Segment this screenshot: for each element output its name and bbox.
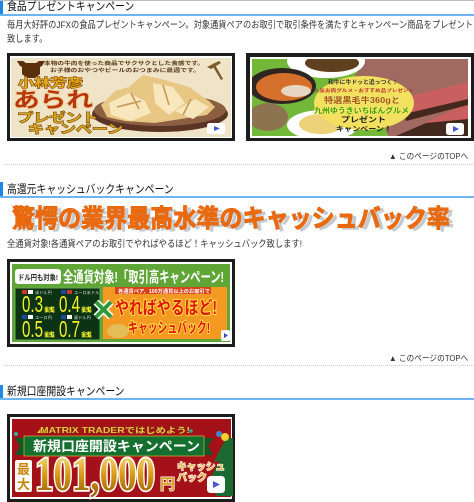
banner: new account opening campaign [7, 414, 235, 502]
heading: new account campaign [0, 384, 474, 400]
banner: all currency trading volume campaign: 0.7 [59, 316, 80, 342]
heading: new account campaign: 新規口座開設キャンペーン [7, 386, 125, 398]
banner: all currency trading volume campaign: 銭 [81, 306, 92, 314]
banner: beef and gourmet present campaign: 人気お肉グルメ・おすすめ品プレゼント [314, 87, 414, 94]
banner: beef and gourmet present campaign: キャンペーン！ [336, 125, 392, 133]
banner: arare present campaign: キャンペーン [28, 122, 123, 136]
banner: beef and gourmet present campaign: 特選黒毛牛360gと [324, 95, 400, 105]
link: page top: ▲ このページのTOPへ [389, 353, 468, 363]
banner: beef and gourmet present campaign [246, 53, 474, 141]
banner: arare present campaign: 小林芳彦 [18, 75, 83, 90]
banner: arare present campaign: プレゼント [17, 110, 98, 125]
banner: new account opening campaign: 新規口座開設キャンペーン [33, 439, 200, 454]
banner: arare present campaign: あられ [13, 89, 93, 112]
text block: food campaign intro: 毎月大好評のJFXの食品プレゼントキャンペーン。対象通貨ペアのお取引で取引条件を満たすとキャンペーン商品をプレゼント [7, 20, 473, 31]
banner: new account opening campaign: 大 [17, 477, 30, 492]
banner: all currency trading volume campaign: 豪ドル円 [74, 314, 91, 321]
banner: all currency trading volume campaign: ドル円も対象! [18, 272, 58, 282]
banner: arare present campaign: お子様のおやつやビールのおつまみに最適です。 [50, 66, 200, 74]
banner: new account opening campaign: 101,000 [35, 448, 155, 501]
banner: all currency trading volume campaign: 0.4 [59, 291, 80, 317]
banner: all currency trading volume campaign: ユーロ米ドル [74, 289, 99, 296]
text block: food campaign intro: 致します。 [7, 34, 47, 45]
banner: all currency trading volume campaign: 銭 [44, 331, 55, 339]
heading: high cashback campaign: 高還元キャッシュバックキャンペーン [7, 184, 174, 196]
heading: food present campaign: 食品プレゼントキャンペーン [7, 1, 134, 13]
banner: new account opening campaign: バック [177, 472, 207, 484]
banner: beef and gourmet present campaign: プレゼント [341, 115, 386, 124]
banner: all currency trading volume campaign: 0.3 [22, 291, 43, 317]
banner: all currency trading volume campaign: 銭 [44, 306, 55, 314]
link: page top: ▲ このページのTOPへ [389, 151, 468, 161]
banner: new account opening campaign: キャッシュ [177, 462, 225, 473]
headline: highest cashback rate in the industry: 驚愕の業界最高水準のキャッシュバック率 [12, 205, 450, 233]
banner: all currency trading volume campaign [7, 259, 235, 347]
banner: arare present campaign [7, 53, 235, 141]
text block: food campaign intro [7, 20, 473, 45]
banner: all currency trading volume campaign: 各通貨ペア、100万通貨以上のお取引で [118, 288, 210, 295]
banner: beef and gourmet present campaign: 九州ゆうきいちばんグルメ [314, 105, 409, 115]
text block: cashback intro: 全通貨対象!各通貨ペアのお取引でやればやるほど！キャッシュバック致します! [7, 239, 302, 250]
banner: new account opening campaign: MATRIX TRADERではじめよう! [40, 426, 190, 435]
banner: all currency trading volume campaign: ユーロ円 [35, 315, 52, 321]
heading: high cashback campaign [0, 182, 474, 198]
banner: all currency trading volume campaign: 銭 [81, 331, 92, 339]
banner: beef and gourmet present campaign: 和牛に牛ドッと追っつく！ [328, 78, 398, 86]
banner: new account opening campaign: 円 [160, 476, 175, 493]
banner: all currency trading volume campaign: 米ドル円 [35, 289, 52, 296]
heading: food present campaign [0, 0, 474, 16]
banner: all currency trading volume campaign: 0.5 [22, 316, 43, 342]
banner: new account opening campaign: 最 [17, 462, 30, 477]
banner: arare present campaign: 本物の牛肉を使った商品でサクサクとした食感です。 [44, 59, 204, 67]
